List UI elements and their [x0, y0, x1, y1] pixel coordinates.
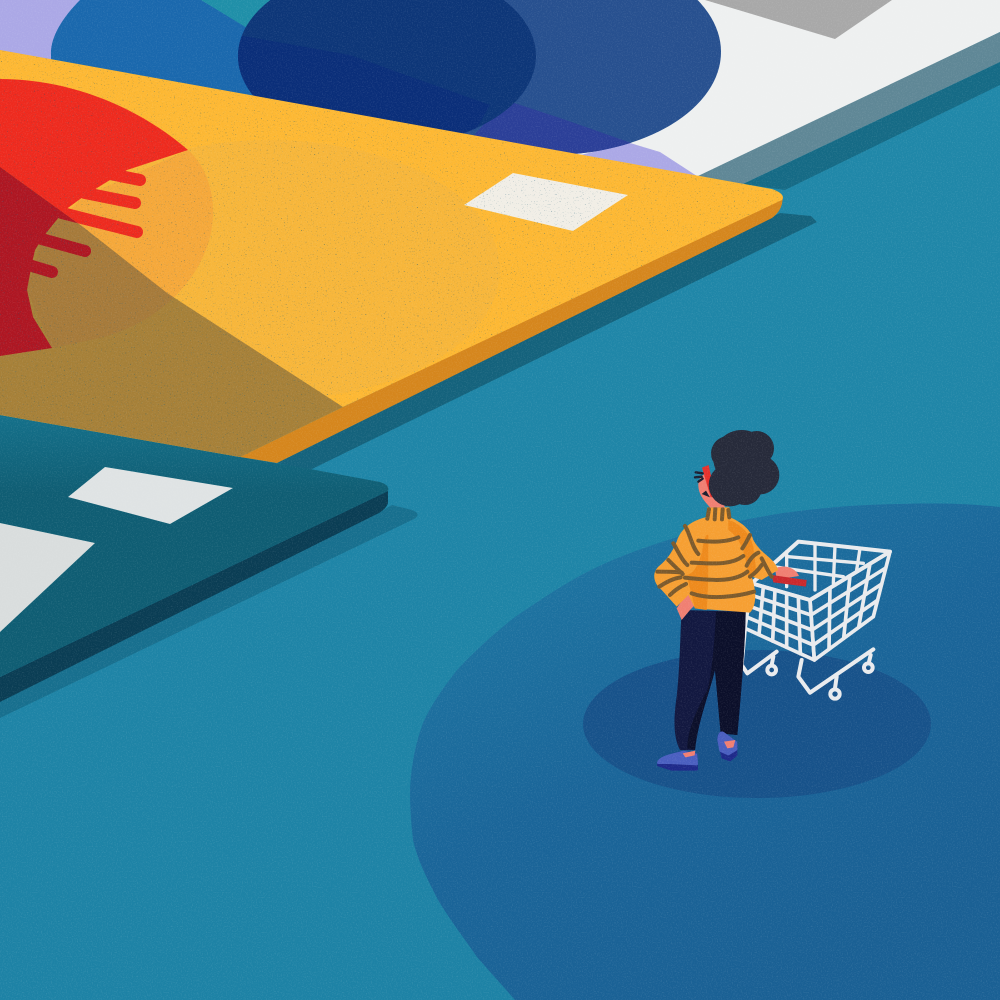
lavender area left — [0, 0, 90, 80]
back card shadow — [743, 62, 1000, 190]
navy band in dark circle — [238, 35, 490, 140]
cart right panel — [810, 552, 890, 660]
right hand on handle — [772, 566, 807, 587]
cart left panel — [745, 583, 814, 660]
shopping cart — [742, 542, 890, 699]
yellow card face — [0, 50, 783, 457]
floor circle: inner spotlight — [583, 650, 931, 798]
back card: white with blue circles — [0, 0, 1000, 190]
white chip on teal card — [68, 467, 233, 524]
deep blue overlap band — [474, 103, 631, 154]
red fingers — [22, 173, 140, 272]
teal card — [0, 415, 418, 718]
cart rim — [752, 542, 890, 600]
shaded pale circle — [66, 214, 174, 298]
shaded red segment — [0, 167, 91, 356]
sweater collar — [706, 507, 731, 521]
grey chip on back card — [705, 0, 892, 39]
back card thickness — [698, 32, 1000, 184]
floor circle: large spotlight — [410, 503, 1000, 1000]
red circle segment — [0, 79, 188, 356]
sweater stripes — [657, 509, 772, 597]
pale red circle on yellow card — [27, 150, 213, 348]
right shoe — [719, 733, 736, 760]
teal wedge — [195, 0, 280, 40]
dark navy circle — [238, 0, 536, 146]
left hand on hip — [677, 593, 697, 620]
large pale circle on yellow card — [40, 140, 500, 400]
teal card shadow — [0, 505, 418, 718]
yellow card side — [240, 197, 783, 463]
legs — [674, 610, 746, 750]
yellow card shadow on floor — [277, 213, 817, 470]
cart wheels and undercarriage — [742, 628, 873, 699]
white chip on yellow card — [464, 173, 628, 231]
diagonal shadow on yellow card — [0, 167, 343, 457]
teal card face — [0, 415, 388, 677]
shopper and cart (drawn in 3x zoom coordinates) — [654, 430, 890, 769]
hair — [709, 430, 779, 506]
darker leg shading — [687, 612, 746, 750]
cart back grid — [773, 544, 863, 590]
dark speckle on yellow card — [0, 50, 781, 456]
sweater shading — [687, 520, 757, 610]
teal card side — [0, 491, 388, 702]
lavender sliver — [560, 143, 700, 178]
face and headband — [695, 465, 725, 507]
right blue circle — [379, 0, 721, 155]
left blue circle — [51, 0, 270, 108]
large white chip on teal card — [0, 523, 95, 632]
left shoe — [658, 751, 697, 769]
yellow card — [0, 50, 783, 463]
sweater — [654, 507, 778, 613]
